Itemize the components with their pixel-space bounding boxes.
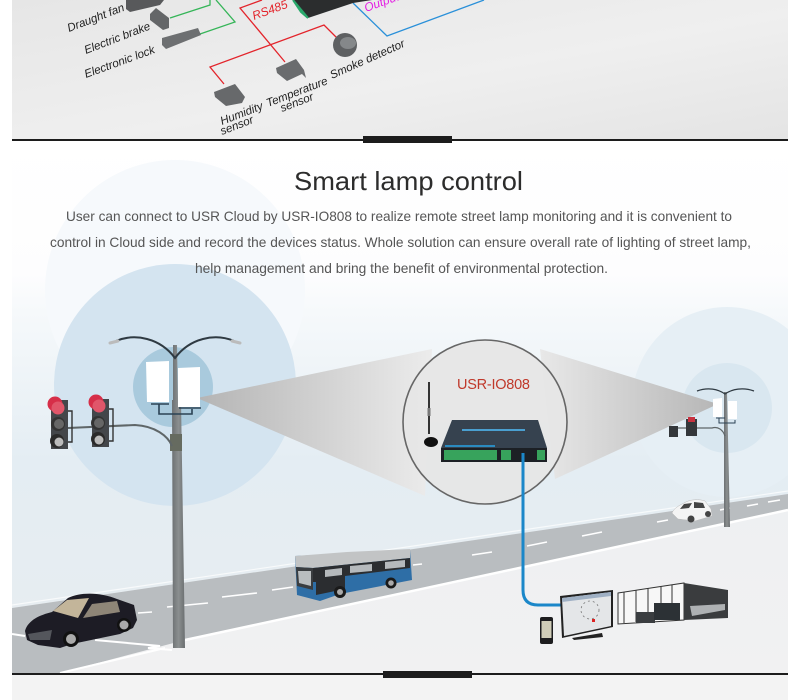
signal arm <box>68 425 172 446</box>
right lamp pole <box>678 389 754 527</box>
divider: top <box>12 136 788 143</box>
icon: antenna <box>424 382 438 447</box>
left traffic light 2 <box>88 394 113 447</box>
icon: smoke detector <box>333 33 357 57</box>
description text: User can connect to USR Cloud by USR-IO808 to realize remote street lamp monitoring and it is convenient to <box>66 208 732 224</box>
labels <box>66 0 408 138</box>
blue output wiring <box>353 0 484 36</box>
left pale halo <box>54 264 296 506</box>
title: Smart lamp control <box>294 166 523 196</box>
icon: electric brake <box>150 8 169 30</box>
icon: IO controller <box>293 0 372 18</box>
red RS485 wiring <box>210 0 337 84</box>
labels: Smoke detector <box>328 38 408 82</box>
labels: Electronic lock <box>83 44 158 81</box>
cone: left lamp to device <box>197 349 432 496</box>
icon: monitor <box>560 590 613 640</box>
labels: Humidity <box>219 100 266 128</box>
cone: right lamp to device <box>540 349 718 479</box>
icon: humidity sensor <box>214 84 245 106</box>
ground <box>66 512 788 673</box>
panel: access control diagram <box>12 0 788 140</box>
antenna panels <box>146 361 201 414</box>
left inner halo <box>133 347 213 427</box>
icon: smartphone <box>540 617 553 644</box>
device name: USR-IO808 <box>457 377 530 393</box>
icon: draught fan <box>126 0 164 12</box>
labels: sensor <box>279 91 316 115</box>
bus <box>295 549 412 601</box>
right pale halo <box>636 307 788 376</box>
cable <box>523 453 562 605</box>
icon: temperature sensor <box>276 59 306 81</box>
icon: electronic lock <box>162 28 201 49</box>
description text <box>50 208 751 276</box>
bottom strip <box>12 675 788 700</box>
labels: Electric brake <box>83 21 152 57</box>
description text: control in Cloud side and record the devices status. Whole solution can ensure overall rate of lighting of street lamp, <box>50 234 751 250</box>
right inner halo <box>682 363 772 453</box>
labels: sensor <box>219 114 256 138</box>
left lamp pole <box>68 337 240 648</box>
right traffic lights <box>669 417 697 437</box>
panel: smart lamp scene <box>12 141 800 674</box>
green wiring <box>170 0 235 34</box>
black car <box>25 594 137 648</box>
road <box>12 494 788 673</box>
description text: help management and bring the benefit of environmental protection. <box>195 260 608 276</box>
divider: bottom <box>12 671 788 678</box>
road markings <box>12 491 788 673</box>
left traffic light 1 <box>48 396 72 449</box>
device callout circle <box>403 340 567 504</box>
icon: USR-IO808 device <box>441 420 547 462</box>
labels: Temperature <box>265 75 330 110</box>
white car <box>672 500 712 522</box>
icon: control room <box>618 583 728 624</box>
labels: Draught fan <box>66 2 126 35</box>
lamp arms <box>116 337 234 358</box>
